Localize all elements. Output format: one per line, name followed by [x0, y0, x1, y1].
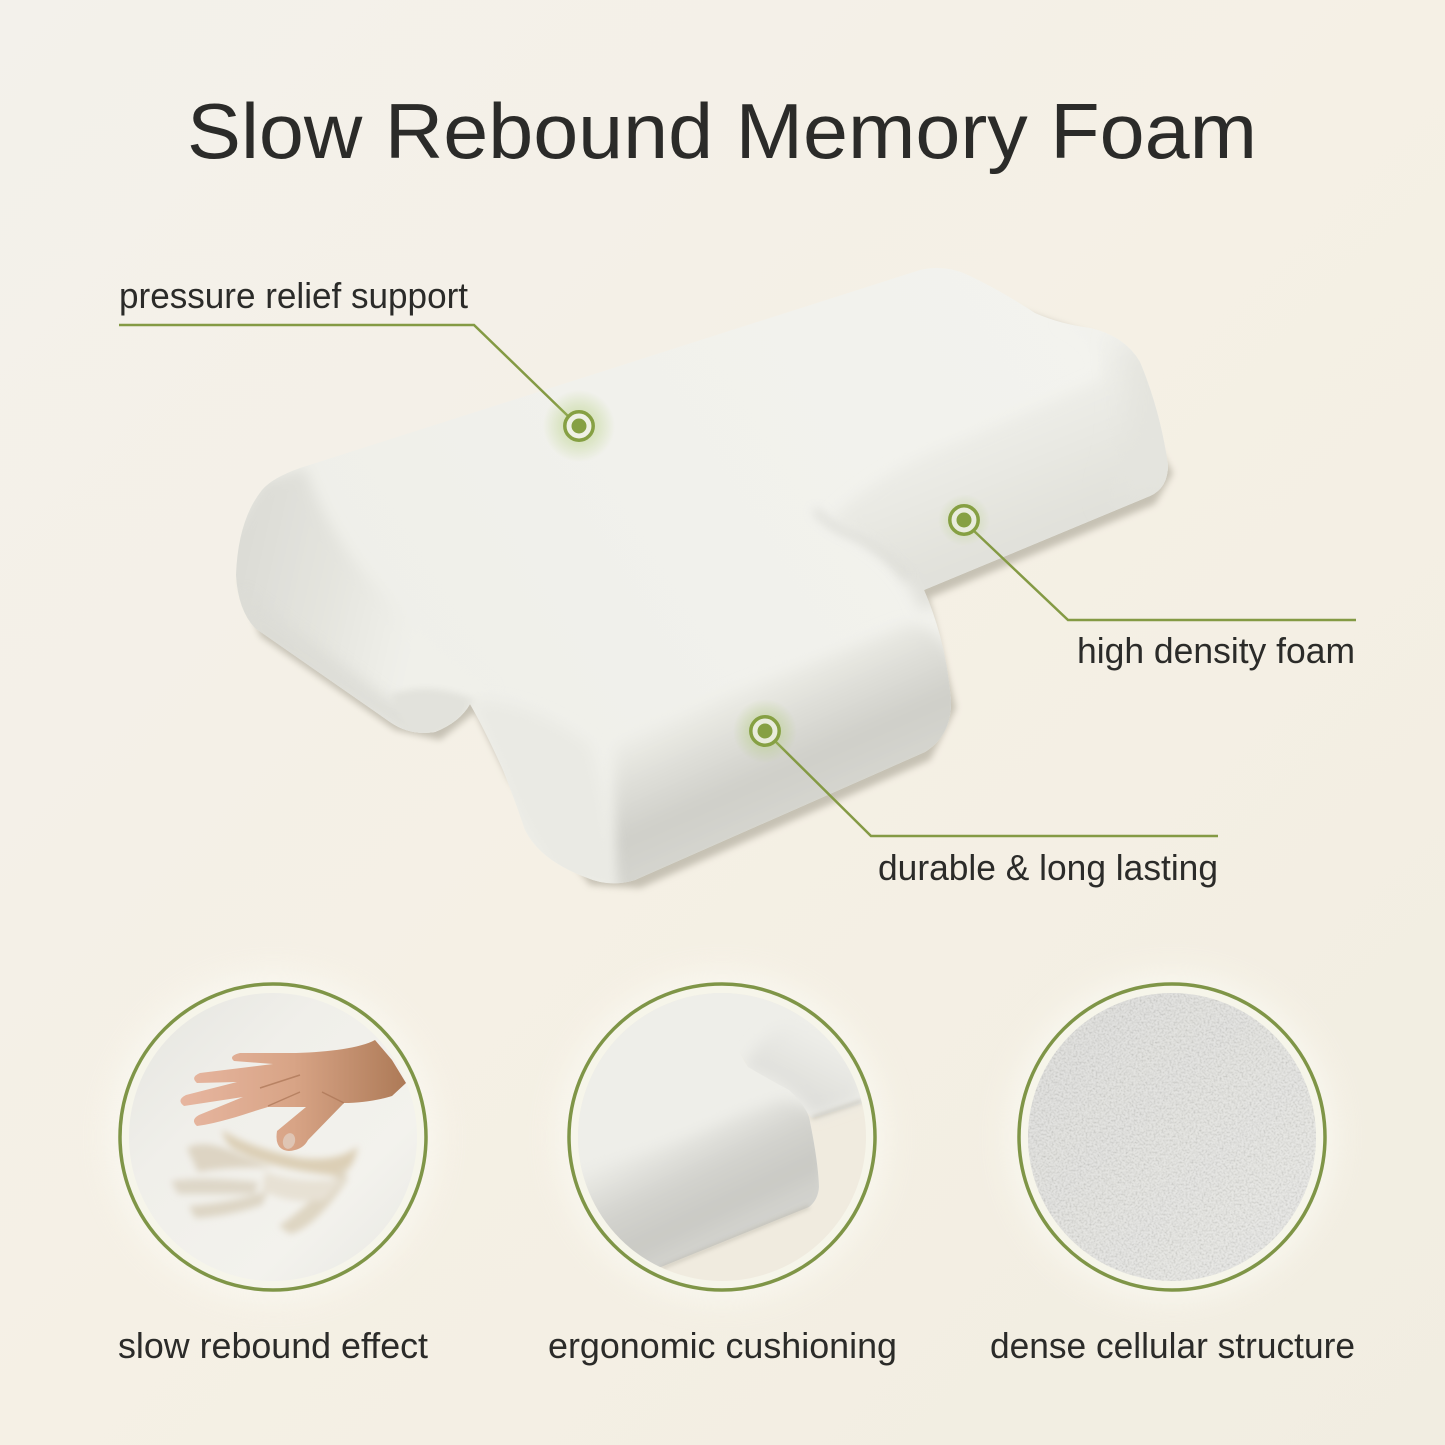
infographic	[118, 102, 1356, 1366]
caption: dense cellular structure: dense cellular structure	[990, 1325, 1355, 1366]
photo: pillow close-up	[580, 993, 866, 1281]
label: durable & long lasting	[878, 847, 1218, 888]
pillow body	[236, 271, 1168, 884]
marker	[938, 494, 990, 546]
pillow left underside	[320, 660, 405, 730]
pillow back side face	[848, 400, 1146, 607]
hand	[180, 1040, 406, 1151]
panel: slow rebound effect	[118, 982, 428, 1292]
pillow left end face	[236, 471, 468, 720]
leader line	[973, 530, 1356, 620]
panel: ergonomic cushioning	[567, 982, 877, 1292]
photo: hand on foam	[129, 993, 406, 1260]
shaded back crease	[752, 1048, 850, 1112]
pillow notch shadow	[397, 690, 470, 732]
marker	[543, 390, 615, 462]
label: high density foam	[1077, 630, 1355, 671]
hand print	[171, 1130, 358, 1234]
thumb crease	[260, 1075, 344, 1106]
thumbnail	[282, 1133, 296, 1149]
caption: ergonomic cushioning: ergonomic cushioning	[548, 1325, 897, 1366]
pillow right end shading	[1142, 368, 1143, 369]
callout: pressure relief support	[119, 275, 615, 462]
callout: durable and long lasting	[733, 699, 1218, 888]
pillow front face	[612, 628, 951, 883]
leader line	[775, 741, 1218, 836]
pillow	[236, 294, 1175, 891]
front piece	[578, 994, 819, 1267]
label: pressure relief support	[119, 275, 468, 316]
marker	[733, 699, 797, 763]
floor edges	[661, 1207, 809, 1268]
callout: high density foam	[938, 494, 1356, 671]
crease	[816, 512, 892, 564]
photo: foam texture	[1028, 993, 1316, 1281]
leader line	[119, 325, 569, 417]
title: Slow Rebound Memory Foam	[187, 87, 1257, 175]
back portion	[724, 993, 794, 1058]
caption: slow rebound effect: slow rebound effect	[118, 1325, 428, 1366]
pillow shadow	[241, 278, 1173, 888]
panel: dense cellular structure	[1017, 982, 1330, 1295]
pillow front left rounded edge	[470, 700, 615, 890]
